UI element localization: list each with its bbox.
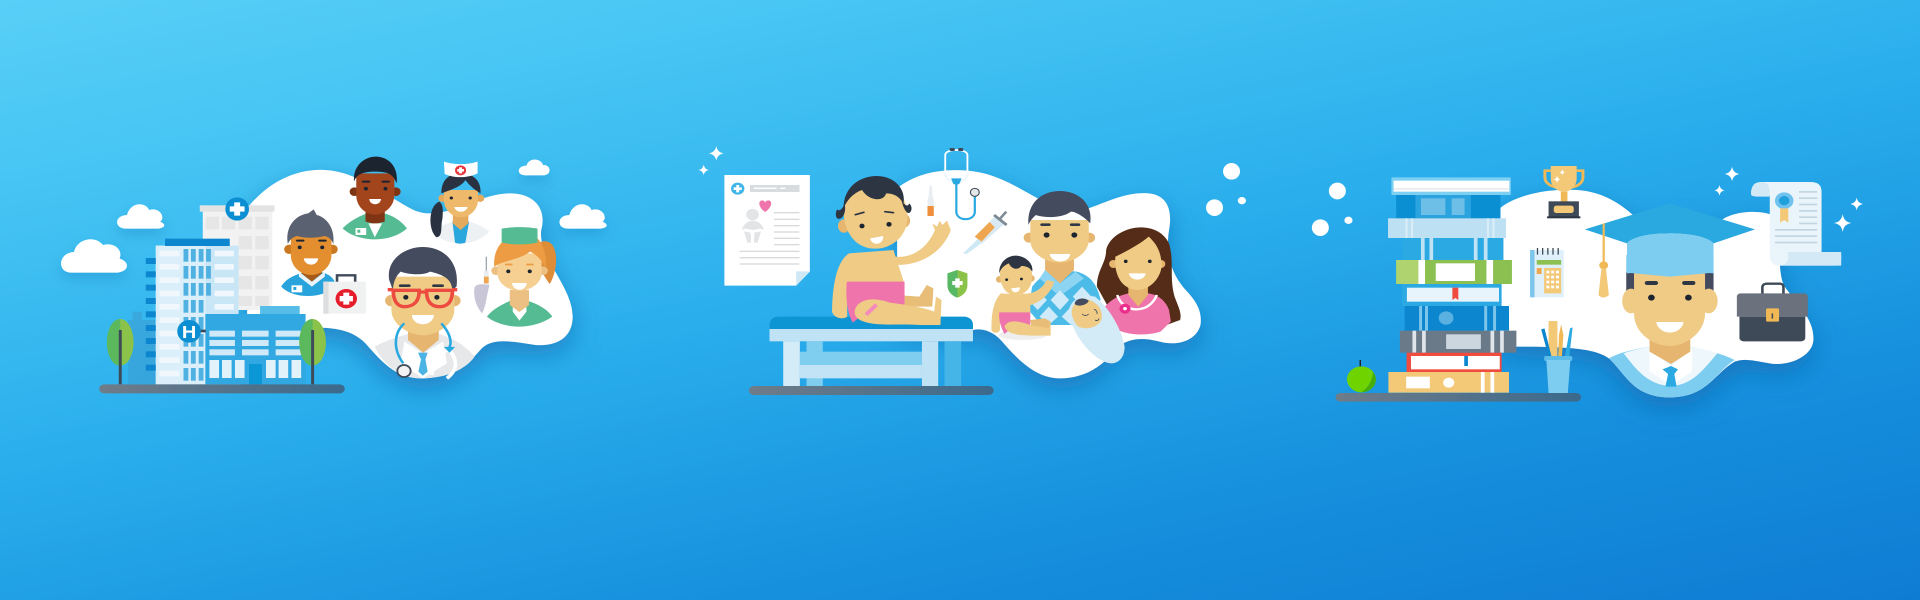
big baby on table <box>832 176 951 325</box>
icon: notebook with calculator <box>1530 248 1564 297</box>
person: doctor with red glasses <box>375 247 475 378</box>
small background building <box>128 312 156 384</box>
panel: child health and family <box>699 146 1246 395</box>
small baby <box>991 256 1054 340</box>
person: nurse with cap <box>430 162 489 244</box>
red glasses <box>388 290 457 307</box>
shelf <box>1336 393 1581 402</box>
decorative dots <box>1312 183 1353 236</box>
icon: diploma scroll <box>1751 182 1841 266</box>
ground bar <box>749 386 994 395</box>
sparkles <box>699 146 724 175</box>
icon: first aid kit <box>323 275 366 314</box>
book stack <box>1388 177 1516 393</box>
white cloud backdrop <box>1500 190 1813 397</box>
panel: education and graduation <box>1312 166 1863 402</box>
person: dark-skinned nurse <box>343 157 407 239</box>
tassel <box>1599 223 1609 297</box>
tree left <box>107 319 134 384</box>
icon: green apple <box>1347 360 1376 392</box>
tree right <box>299 319 326 384</box>
icon: briefcase <box>1737 284 1808 341</box>
person: nurse with syringe <box>474 227 556 327</box>
person: young man in blue <box>281 209 338 296</box>
icon: shield <box>947 270 967 298</box>
icon: ampoule <box>927 186 934 216</box>
white cloud backdrop <box>247 170 573 378</box>
newborn in blanket <box>1069 296 1125 363</box>
white cloud backdrop <box>897 170 1201 378</box>
icon: pencil cup <box>1541 321 1573 393</box>
sparkles <box>1714 167 1863 232</box>
icon: stethoscope <box>945 148 979 219</box>
icon: syringe <box>963 212 1007 254</box>
father <box>1024 191 1101 325</box>
icon: doctor stethoscope <box>396 323 455 378</box>
icon: syringe and glove <box>474 257 489 313</box>
medical record document <box>724 175 810 286</box>
icon: trophy <box>1545 166 1583 218</box>
decorative dots <box>1206 163 1246 216</box>
baby pictogram <box>742 209 764 243</box>
icon: hospital H sign: H <box>182 323 196 343</box>
exam table <box>770 317 973 386</box>
main tower <box>146 239 239 384</box>
front hospital block <box>205 306 306 384</box>
ground bar <box>99 384 345 393</box>
icon: medical cross badge <box>225 197 249 221</box>
icon: heart <box>759 200 771 212</box>
clouds <box>61 159 607 273</box>
mother <box>1097 227 1181 334</box>
panel: hospital and medical staff <box>61 157 607 393</box>
graduate <box>1585 203 1755 397</box>
back tower <box>200 205 275 310</box>
icon: hospital H sign <box>177 320 206 343</box>
